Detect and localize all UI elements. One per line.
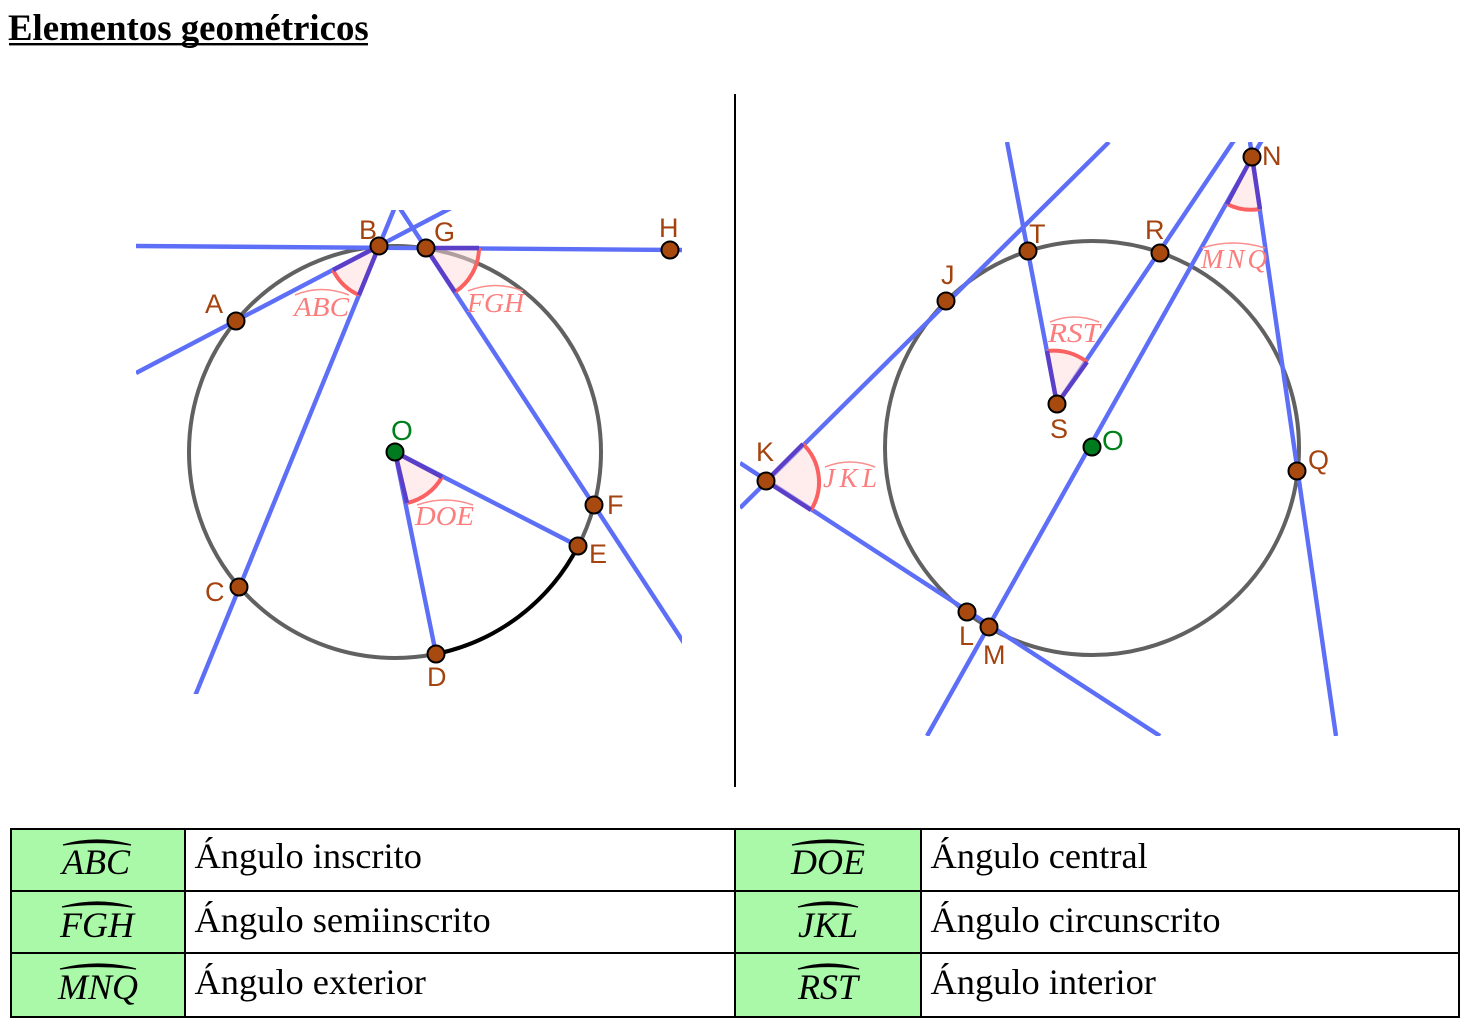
points and labels: A [205,289,223,319]
points and labels: R [1145,215,1164,245]
points and labels: E [589,539,607,569]
angle RST [1047,317,1102,404]
row: MNQ exterior angle: MNQ [57,967,138,1007]
points and labels: H [659,213,678,243]
angle MNQ [1200,157,1267,274]
circle with center O [189,246,601,658]
points and labels: B [359,215,377,245]
row: ABC inscribed angle: ABC [60,842,131,882]
row: FGH semi-inscribed angle [59,900,491,945]
points and labels: F [607,490,624,520]
points and labels: N [1262,141,1282,171]
row: MNQ exterior angle [57,962,426,1007]
angle ABC [292,246,379,322]
points and labels: Q [1308,445,1329,475]
points and labels: M [983,640,1006,670]
angle DOE [395,452,475,531]
angle JKL: JKL [823,463,877,493]
points and labels: G [434,217,455,247]
points and labels: D [427,662,446,692]
row: FGH semi-inscribed angle: FGH [59,905,136,945]
angle ABC: ABC [292,292,350,322]
points and labels: J [941,260,954,290]
blue lines [136,207,684,696]
circle with center O [885,241,1299,655]
points and labels: O [391,415,413,446]
angle JKL [766,444,877,510]
row: RST interior angle: RST [797,967,861,1007]
row: DOE central angle: Ángulo central [930,836,1148,876]
points and labels [756,141,1329,670]
arc DE [436,546,578,654]
row: JKL circumscribed angle: Ángulo circunscrito [930,900,1221,940]
points and labels [205,213,678,692]
row: DOE central angle [790,836,1148,882]
row: JKL circumscribed angle [798,900,1221,945]
points and labels: T [1029,219,1046,249]
row: MNQ exterior angle: Ángulo exterior [194,962,426,1002]
table: angle types legend [11,829,1459,1017]
green cells [12,830,185,1016]
panel: right circle diagram [740,136,1336,736]
points and labels: C [205,577,224,607]
row: ABC inscribed angle: Ángulo inscrito [194,836,422,876]
divider [734,94,736,787]
angle RST: RST [1047,318,1102,348]
points and labels: S [1050,414,1068,444]
row: FGH semi-inscribed angle: Ángulo semiinscrito [194,900,491,940]
blue lines [740,136,1336,736]
angle FGH [426,248,526,318]
row: ABC inscribed angle [60,836,422,882]
table grid [11,829,1459,1017]
points and labels: K [756,437,774,467]
angle DOE: DOE [414,501,475,531]
row: RST interior angle [797,962,1156,1007]
title: Elementos geométricos [8,7,369,48]
angle FGH: FGH [466,288,526,318]
row: DOE central angle: DOE [790,842,865,882]
row: RST interior angle: Ángulo interior [930,962,1156,1002]
angle MNQ: MNQ [1200,244,1267,274]
row: JKL circumscribed angle: JKL [798,905,858,945]
points and labels: O [1102,425,1124,456]
panel: left circle diagram [136,207,684,696]
points and labels: L [959,621,974,651]
